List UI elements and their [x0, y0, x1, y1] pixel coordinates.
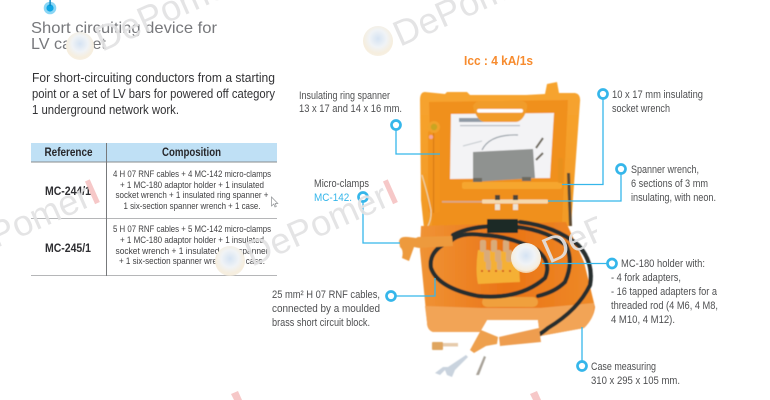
- table row: MC-244/1: 1 six-section spanner wrench + 1 case.: [124, 201, 260, 211]
- table header: [31, 143, 277, 162]
- callout: micro-clamps: [314, 178, 400, 243]
- callout: MC-180 holder: 4 M10, 4 M12).: [611, 314, 675, 326]
- watermark: repeated brand text: DeP: [536, 205, 616, 271]
- table row: MC-245/1: MC-245/1: [45, 241, 91, 255]
- heading: Icc rating: Icc : 4 kA/1s: [464, 54, 533, 68]
- case lid: [420, 82, 580, 228]
- watermark globe over title: [66, 32, 94, 60]
- MC-180 holder with adapters: [476, 240, 520, 284]
- callout: insulating ring spanner: Insulating ring spanner: [299, 90, 390, 102]
- icon: mouse cursor: [272, 197, 278, 207]
- callout: RNF cables: brass short circuit block.: [272, 317, 370, 329]
- callout: socket wrench: [562, 89, 703, 184]
- watermark: repeated brand text: DePomerI: [239, 171, 403, 274]
- grey block on sheet: [473, 149, 535, 182]
- table row: MC-244/1: [45, 169, 271, 211]
- table row: MC-244/1: MC-244/1: [45, 184, 91, 198]
- table row: MC-245/1: 5 H 07 RNF cables + 5 MC-142 micro-clamps: [113, 224, 271, 234]
- illustration: orange tool case: [399, 82, 595, 377]
- front lip of base: [425, 303, 594, 336]
- callout: micro-clamps: MC-142.: [314, 192, 352, 204]
- callout: case dimensions: [578, 327, 680, 387]
- callout: MC-180 holder: MC-180 holder with:: [621, 258, 705, 270]
- title: Short circuiting device for: [31, 20, 217, 37]
- watermark globe over table: [215, 246, 245, 276]
- case base: [420, 222, 595, 336]
- callout: socket wrench: socket wrench: [612, 103, 670, 115]
- callout: micro-clamps: Micro-clamps: [314, 178, 369, 190]
- black cables: [431, 222, 591, 335]
- callout: RNF cables: 25 mm² H 07 RNF cables,: [272, 289, 380, 301]
- instruction sheet: [450, 113, 554, 179]
- socket wrench in lid: [462, 158, 572, 226]
- micro-clamp at cable bottom end: [470, 328, 541, 353]
- watermark globe top right: [363, 26, 393, 56]
- table row: MC-244/1: socket wrench + 1 insulated ring spanner +: [116, 190, 268, 200]
- callout: spanner wrench: 6 sections of 3 mm: [631, 178, 708, 190]
- callout: insulating ring spanner: 13 x 17 and 14 x 16 mm.: [299, 103, 402, 115]
- callout: socket wrench: 10 x 17 mm insulating: [612, 89, 703, 101]
- carry handle on base: [482, 297, 538, 307]
- callout: MC-180 holder: threaded rod (4 M6, 4 M8,: [611, 300, 718, 312]
- loose accessories: [432, 342, 486, 377]
- table header: Reference: [44, 145, 93, 159]
- watermark globe over holder: [511, 243, 541, 273]
- callout: RNF cables: [272, 278, 435, 329]
- callout: insulating ring spanner: [299, 90, 440, 154]
- table row: MC-245/1: socket wrench + 1 insulated ring spanner: [116, 246, 268, 256]
- table row: MC-244/1: + 1 MC-180 adaptor holder + 1 insulated: [120, 180, 264, 190]
- callout: MC-180 holder: [542, 258, 718, 326]
- callout: case dimensions: Case measuring: [591, 361, 656, 373]
- callout: case dimensions: 310 x 295 x 105 mm.: [591, 375, 680, 387]
- title: [31, 20, 217, 53]
- callout: spanner wrench: Spanner wrench,: [631, 164, 699, 176]
- intro paragraph: For short-circuiting conductors from a starting: [32, 70, 275, 85]
- icon: top blue marker dot: [44, 0, 56, 14]
- title: LV cabinet: [31, 36, 107, 53]
- callout: RNF cables: connected by a moulded: [272, 303, 380, 315]
- callout: spanner wrench: [548, 164, 716, 204]
- thin wire on lid: [422, 175, 431, 232]
- table row: MC-245/1: [45, 224, 271, 266]
- callout: spanner wrench: insulating, with neon.: [631, 192, 716, 204]
- intro paragraph: [32, 70, 276, 117]
- spanner wrench in lid: [442, 195, 548, 210]
- intro paragraph: 1 underground network work.: [32, 102, 179, 117]
- callout: MC-180 holder: - 4 fork adapters,: [611, 272, 681, 284]
- table: reference and composition: [31, 143, 277, 276]
- table row: MC-245/1: + 1 six-section spanner wrench + 1 case.: [119, 256, 265, 266]
- carrying handle slot: [473, 101, 527, 122]
- intro paragraph: point or a set of LV bars for powered off category: [32, 86, 276, 101]
- black cable block: [487, 219, 518, 233]
- table row: MC-245/1: + 1 MC-180 adaptor holder + 1 insulated: [120, 235, 264, 245]
- callout: MC-180 holder: - 16 tapped adapters for a: [611, 286, 718, 298]
- micro-clamp on cable end: [399, 236, 453, 261]
- table header: Composition: [162, 145, 221, 159]
- table row: MC-244/1: 4 H 07 RNF cables + 4 MC-142 micro-clamps: [113, 169, 271, 179]
- insulating ring spanner: [428, 121, 440, 213]
